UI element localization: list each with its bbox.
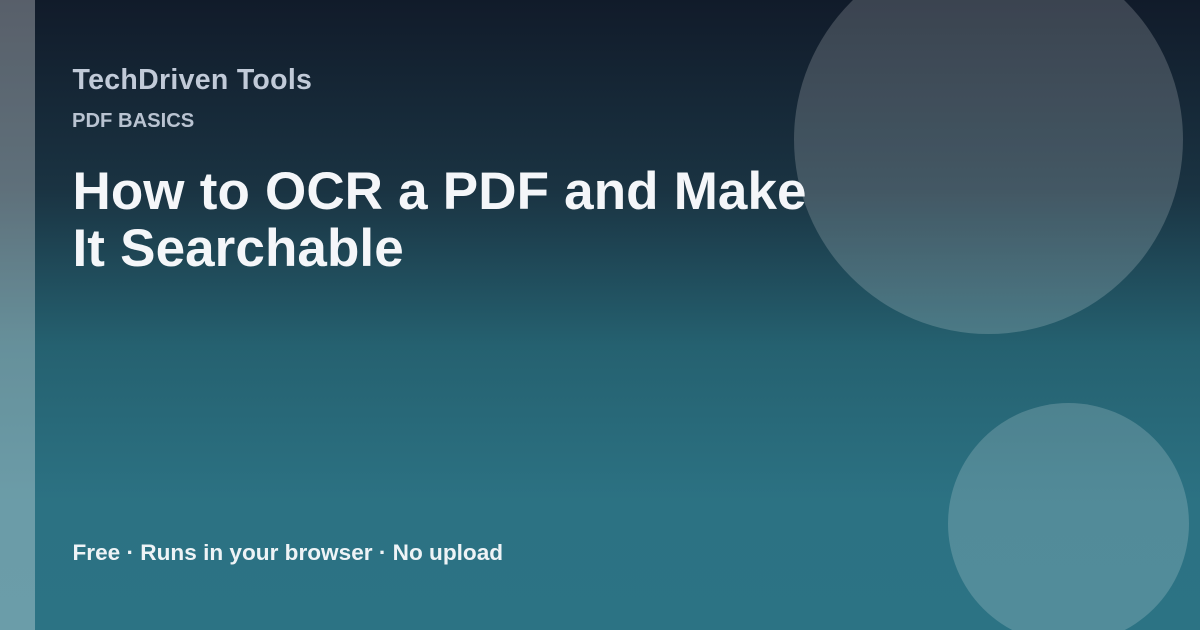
decorative circle: small [948, 403, 1189, 630]
left accent bar [0, 0, 35, 630]
title: How to OCR a PDF and Make [72, 162, 807, 221]
decorative circle: large [794, 0, 1183, 334]
brand name: TechDriven Tools [72, 64, 312, 96]
footer tagline: Free · Runs in your browser · No upload [72, 540, 503, 565]
title: It Searchable [72, 219, 404, 278]
category label: PDF BASICS [72, 110, 194, 132]
title [72, 162, 807, 278]
